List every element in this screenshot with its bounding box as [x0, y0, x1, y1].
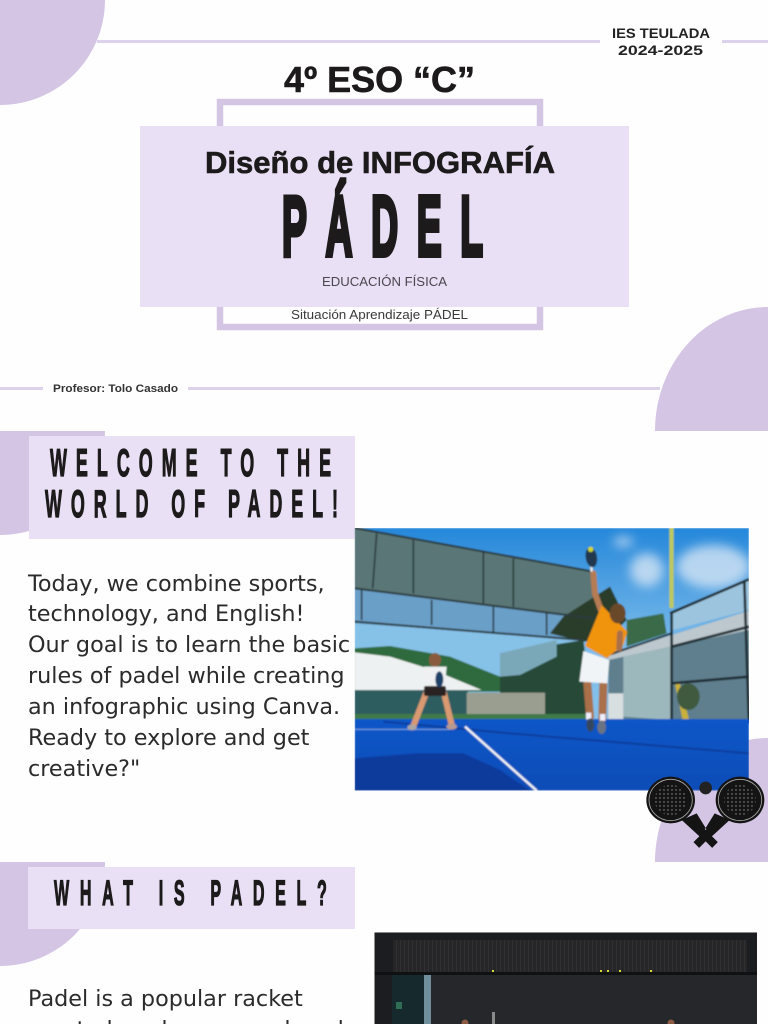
panel: welcome heading [29, 436, 355, 539]
welcome text block: an infographic using Canva. [28, 694, 340, 720]
panel: welcome heading: WELCOME TO THE [50, 443, 331, 485]
panel: what is padel heading: WHAT IS PADEL? [54, 873, 327, 913]
background decorative blob: header right [655, 307, 768, 431]
what is padel text block: Padel is a popular racket [28, 986, 303, 1012]
panel: what is padel heading [28, 867, 355, 929]
welcome text block: rules of padel while creating [28, 663, 345, 689]
school name and year [612, 26, 710, 58]
background decorative blob: welcome section [0, 431, 105, 535]
heading: infographic design: Diseño de INFOGRAFÍA [205, 145, 555, 180]
welcome text block: creative?" [28, 756, 140, 782]
welcome text block: Today, we combine sports, [27, 571, 325, 597]
background decorative blob: what is padel section [0, 862, 105, 966]
panel: welcome heading: WORLD OF PADEL! [45, 484, 338, 526]
photo: indoor dark padel court [374, 932, 757, 1024]
welcome text block: Our goal is to learn the basic [28, 632, 350, 658]
title panel [140, 126, 629, 307]
title frame [220, 102, 540, 327]
teacher name: Profesor: Tolo Casado [53, 383, 178, 395]
photo: padel players on blue court [355, 528, 750, 791]
school name and year: 2024-2025 [618, 43, 704, 58]
main title: padel: PÁDEL [282, 179, 483, 274]
welcome text block: Ready to explore and get [28, 725, 310, 751]
school name and year: IES TEULADA [612, 26, 710, 41]
icon: crossed padel rackets and ball [646, 777, 764, 845]
welcome text block: technology, and English! [28, 601, 304, 627]
woman player [407, 653, 457, 730]
background decorative blob: racket backing [655, 738, 768, 862]
background decorative blob: top left [0, 0, 105, 105]
learning situation label: Situación Aprendizaje PÁDEL [291, 307, 468, 322]
what is padel text block [28, 986, 344, 1024]
welcome text block [27, 571, 350, 782]
subject label: EDUCACIÓN FÍSICA [322, 274, 447, 289]
class title: 4º ESO “C” [284, 59, 475, 100]
man player jumping with racket [579, 547, 627, 734]
